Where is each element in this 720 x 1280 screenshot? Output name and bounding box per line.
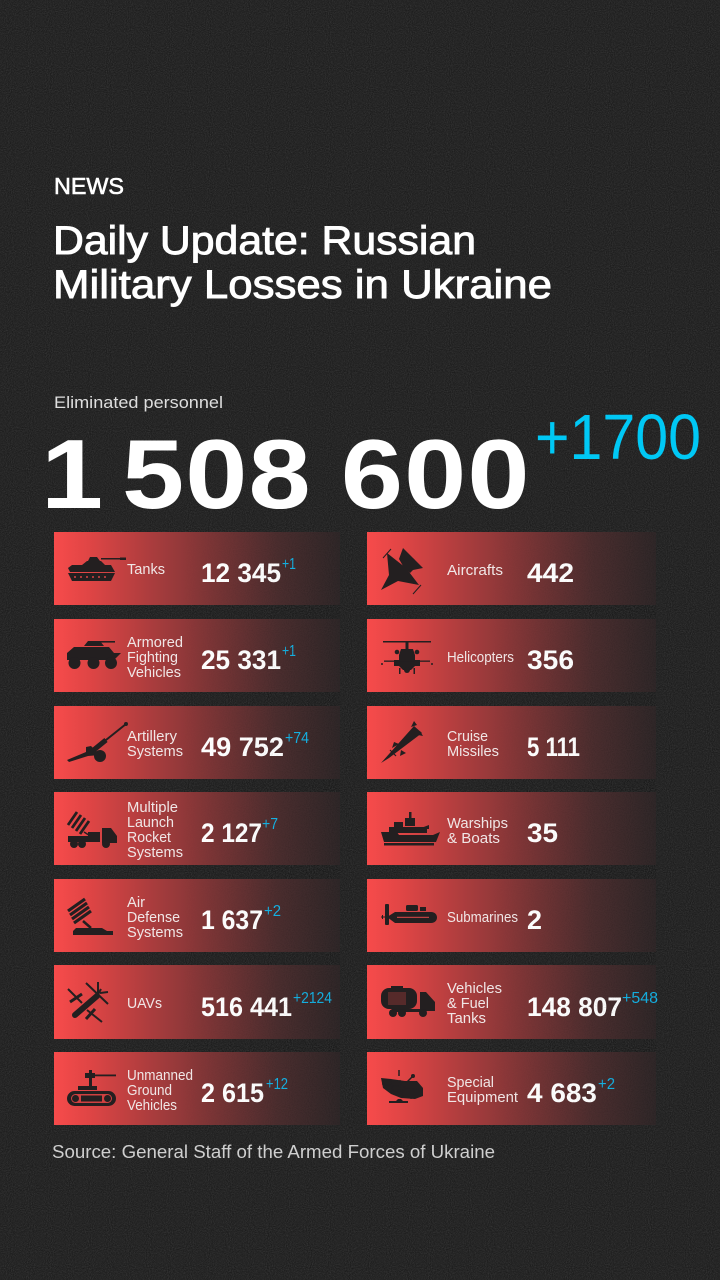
label: Helicopters	[447, 650, 514, 666]
label	[127, 1068, 193, 1114]
icon: submarine	[381, 904, 437, 925]
label: Fighting	[127, 650, 178, 666]
label: eliminated personnel: Eliminated personnel	[54, 393, 223, 412]
icon: ground robot	[67, 1070, 116, 1106]
title: Daily Update: Russian	[53, 219, 476, 263]
delta: +548	[622, 990, 658, 1007]
delta: +2124	[293, 990, 332, 1007]
value: 2 615	[201, 1078, 264, 1108]
label: Equipment	[447, 1090, 518, 1106]
label: & Fuel	[447, 996, 489, 1012]
card: helicopters	[367, 619, 656, 692]
label: Cruise	[447, 729, 488, 745]
value: 1 637	[201, 905, 263, 935]
delta: +2	[264, 903, 281, 920]
big number: personnel: 508	[122, 420, 312, 529]
big number: personnel: 1	[41, 420, 103, 529]
label	[447, 1075, 518, 1106]
delta: +12	[266, 1076, 288, 1093]
title: Military Losses in Ukraine	[53, 263, 552, 307]
icon: howitzer	[67, 722, 128, 762]
eyebrow: NEWS: NEWS	[54, 173, 124, 199]
value: 49 752	[201, 732, 284, 762]
label: Systems	[127, 744, 183, 760]
label: Vehicles	[447, 981, 502, 997]
value: 12 345	[201, 558, 281, 588]
icon: cruise missile	[381, 721, 423, 763]
label: Systems	[127, 845, 183, 861]
icon: helicopter	[381, 641, 433, 674]
delta: +74	[285, 730, 309, 747]
label: & Boats	[447, 831, 500, 847]
label: Vehicles	[127, 665, 181, 681]
label: Vehicles	[127, 1098, 177, 1114]
icon: radar dish	[381, 1070, 423, 1103]
icon: rocket launcher truck	[68, 812, 117, 848]
value: 2	[527, 905, 542, 935]
label: Special	[447, 1075, 494, 1091]
value: 25 331	[201, 645, 281, 675]
card: vehicles and fuel tanks	[367, 965, 658, 1039]
label	[447, 729, 499, 760]
icon: tank	[68, 557, 126, 581]
label: Launch	[127, 815, 174, 831]
value: 4 683	[527, 1078, 597, 1108]
card: armored fighting vehicles	[54, 619, 340, 692]
label: Multiple	[127, 800, 178, 816]
icon: fuel truck	[381, 986, 435, 1017]
icon: armored vehicle	[67, 641, 121, 669]
card: submarines	[367, 879, 656, 952]
card: multiple launch rocket systems	[54, 792, 340, 865]
label: Aircrafts	[447, 563, 503, 579]
value: 148 807	[527, 992, 622, 1022]
label	[447, 981, 502, 1027]
personnel delta: +1700	[535, 401, 701, 473]
card: warships and boats	[367, 792, 656, 865]
label: Submarines	[447, 910, 518, 926]
label: Unmanned	[127, 1068, 193, 1084]
big number: personnel: 600	[341, 420, 531, 529]
delta: +1	[282, 643, 296, 660]
label: Missiles	[447, 744, 499, 760]
source line: Source: General Staff of the Armed Forces of Ukraine	[52, 1141, 495, 1162]
label: Rocket	[127, 830, 171, 846]
label: Warships	[447, 816, 508, 832]
card: UAVs	[54, 965, 340, 1039]
icon: UAV	[68, 982, 108, 1022]
title	[53, 219, 552, 307]
card: tanks	[54, 532, 340, 605]
label: Systems	[127, 925, 183, 941]
label: Tanks	[447, 1011, 486, 1027]
label: Artillery	[127, 729, 178, 745]
label: Air	[127, 895, 145, 911]
label	[447, 816, 508, 847]
icon: air defense launcher	[68, 899, 113, 935]
icon: jet	[381, 548, 423, 594]
label	[127, 800, 183, 861]
card: cruise missiles	[367, 706, 656, 779]
label: Ground	[127, 1083, 172, 1099]
label	[127, 895, 183, 941]
card: aircrafts	[367, 532, 656, 605]
card: unmanned ground vehicles	[54, 1052, 340, 1125]
delta: +2	[598, 1076, 615, 1093]
value: 356	[527, 645, 574, 675]
delta: +7	[262, 816, 278, 833]
value: 2 127	[201, 818, 262, 848]
delta: +1	[282, 556, 296, 573]
label: Armored	[127, 635, 183, 651]
label: Defense	[127, 910, 180, 926]
value: 442	[527, 558, 574, 588]
label: UAVs	[127, 996, 162, 1012]
value: 516 441	[201, 992, 292, 1022]
value: 5 111	[527, 732, 580, 762]
label	[127, 635, 183, 681]
card: special equipment	[367, 1052, 656, 1125]
icon: warship	[381, 812, 440, 846]
value: 35	[527, 818, 558, 848]
card: artillery systems	[54, 706, 340, 779]
label	[127, 729, 183, 760]
label: Tanks	[127, 562, 165, 578]
card: air defense systems	[54, 879, 340, 952]
